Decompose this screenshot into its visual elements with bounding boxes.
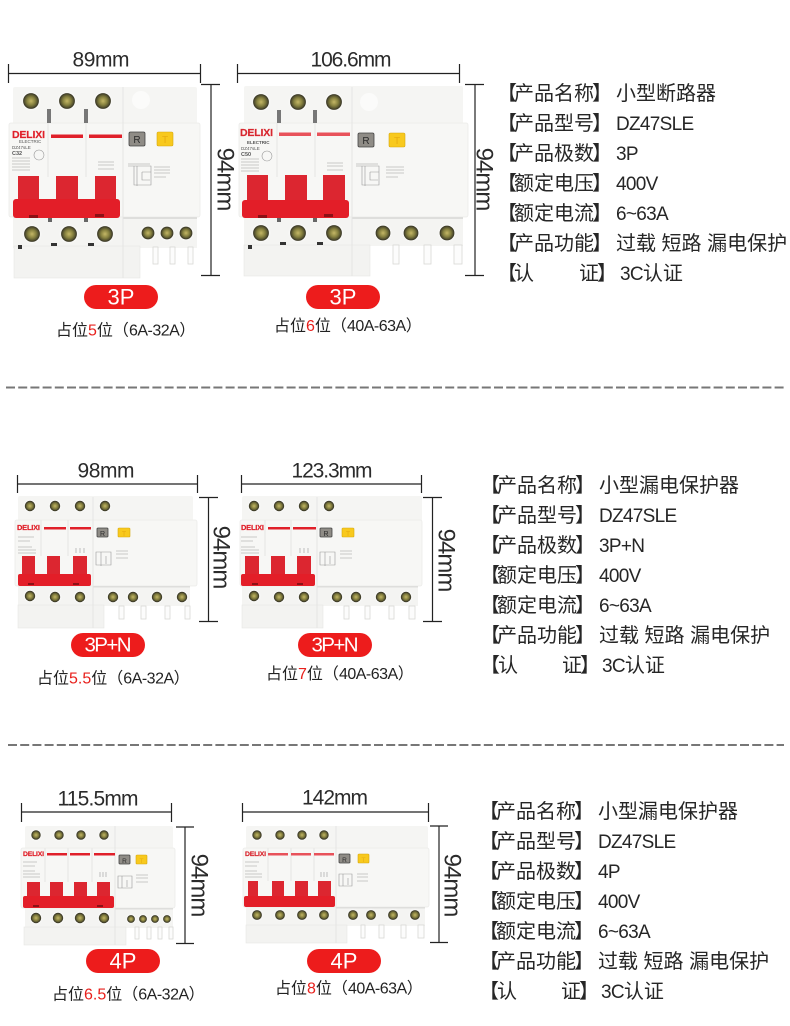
specification list: miniature circuit breaker: 小型断路器 — [616, 82, 716, 105]
specification list: miniature circuit breaker: 产品型号 — [514, 112, 594, 135]
specification list: 4P residual current protector: DZ47SLE — [598, 832, 676, 853]
pole badge: 3P+N: 3P+N — [84, 634, 132, 656]
specification list: 4P residual current protector: 【 — [479, 921, 499, 943]
dimension: height 94mm: 94mm — [208, 526, 234, 588]
breaker unit: 3P 106.6mm — [238, 48, 498, 335]
product photo: 3P breaker: T — [162, 135, 168, 146]
product photo: 3P breaker: C32 — [12, 151, 22, 157]
specification list: miniature circuit breaker: 400V — [616, 174, 659, 195]
specification list: 3P+N residual current protector: 【 — [480, 535, 500, 557]
product photo: 3P+N breaker — [15, 496, 197, 628]
pole badge: 3P+N — [71, 633, 145, 657]
specification list: 4P residual current protector: 4P — [598, 862, 620, 883]
product photo: 3P breaker: DELIXI — [12, 129, 45, 141]
dimension: height 94mm: 94mm — [212, 148, 238, 210]
specification list: miniature circuit breaker: 证 — [579, 262, 599, 285]
specification list: 3P+N residual current protector: 】 — [580, 655, 600, 677]
dimension: height 94mm: 94mm — [432, 529, 460, 591]
specification list: 4P residual current protector: 证 — [561, 980, 581, 1003]
dimension: height 94mm — [199, 498, 234, 622]
caption: occupies 5.5 positions: 占位5.5位（6A-32A） — [37, 670, 190, 688]
specification list: miniature circuit breaker: 【 — [497, 113, 517, 135]
product photo: 3P+N breaker: T — [122, 531, 127, 538]
specification list: 3P+N residual current protector: 额定电压 — [497, 564, 577, 587]
specification list: miniature circuit breaker: 产品名称 — [514, 82, 594, 105]
specification list: miniature circuit breaker: 】 — [592, 83, 612, 105]
caption: occupies 5 positions: 占位5位（6A-32A） — [56, 322, 195, 340]
breaker unit: 3P 89mm — [8, 48, 238, 340]
specification list: 3P+N residual current protector: 【 — [480, 475, 500, 497]
product photo: 3P+N breaker: DELIXI — [241, 523, 264, 532]
specification list: 4P residual current protector: 产品功能 — [496, 950, 576, 973]
specification list: 3P+N residual current protector: 证 — [562, 654, 582, 677]
product photo: 3P breaker: R — [133, 135, 141, 146]
caption: occupies 7 positions: 占位7位（40A-63A） — [266, 665, 414, 683]
specification list: miniature circuit breaker: 【 — [497, 83, 517, 105]
specification list: 4P residual current protector: 【 — [479, 951, 499, 973]
product photo: 4P breaker: T — [362, 857, 366, 864]
specification list: 4P residual current protector: 】 — [579, 981, 599, 1003]
product photo: 3P+N breaker: R — [323, 531, 329, 538]
product photo: 3P breaker — [239, 86, 468, 276]
specification list: 3P+N residual current protector: 产品名称 — [497, 474, 577, 497]
specification list: 3P+N residual current protector: 产品极数 — [497, 534, 577, 557]
specification list: 3P+N residual current protector: 】 — [575, 565, 595, 587]
specification list: 4P residual current protector: 】 — [574, 921, 594, 943]
specification list: miniature circuit breaker: 】 — [592, 113, 612, 135]
specification list: miniature circuit breaker: 【 — [497, 263, 517, 285]
specification list: 4P residual current protector: 额定电流 — [496, 920, 576, 943]
specification list: 3P+N residual current protector: 】 — [575, 505, 595, 527]
specification list: miniature circuit breaker — [497, 82, 787, 285]
specification list: miniature circuit breaker: 【 — [497, 173, 517, 195]
specification list: 4P residual current protector: 6~63A — [598, 922, 651, 943]
specification list: 4P residual current protector: 产品型号 — [496, 830, 576, 853]
specification list: 4P residual current protector: 】 — [574, 801, 594, 823]
dimension: width 142mm: 142mm — [302, 786, 368, 810]
specification list: 3P+N residual current protector: 【 — [480, 505, 500, 527]
pole badge: 4P: 4P — [331, 948, 357, 974]
product photo: 3P breaker: ELECTRIC — [247, 140, 270, 145]
dimension: height 94mm — [465, 84, 498, 276]
specification list: 3P+N residual current protector: 小型漏电保护器 — [599, 474, 739, 497]
product photo: 4P breaker: R — [122, 858, 127, 865]
specification list: 4P residual current protector: 】 — [574, 861, 594, 883]
specification list: 3P+N residual current protector: 过载 短路 漏电保护 — [599, 624, 770, 647]
specification list: 4P residual current protector — [479, 800, 769, 1003]
specification list: 3P+N residual current protector: 产品功能 — [497, 624, 577, 647]
dimension: height 94mm: 94mm — [470, 148, 498, 210]
specification list: 3P+N residual current protector: 6~63A — [599, 596, 652, 617]
specification list: miniature circuit breaker: 】 — [592, 173, 612, 195]
product photo: 3P+N breaker — [240, 496, 422, 628]
dimension: height 94mm — [423, 498, 460, 622]
specification list: 4P residual current protector: 【 — [479, 981, 499, 1003]
dimension: width 123.3mm — [242, 460, 422, 493]
pole badge: 4P — [86, 948, 160, 974]
dimension: width 89mm — [8, 48, 200, 83]
specification list: miniature circuit breaker: 产品极数 — [514, 142, 594, 165]
product photo: 3P breaker: R — [362, 136, 370, 147]
dimension: width 123.3mm: 123.3mm — [292, 460, 372, 482]
specification list: 3P+N residual current protector: 【 — [480, 625, 500, 647]
specification list: 3P+N residual current protector: 产品型号 — [497, 504, 577, 527]
dimension: width 98mm — [18, 460, 198, 493]
specification list: miniature circuit breaker: DZ47SLE — [616, 114, 694, 135]
specification list: 3P+N residual current protector: 认 — [498, 654, 518, 677]
specification list: 3P+N residual current protector: 】 — [575, 625, 595, 647]
specification list: 4P residual current protector: 额定电压 — [496, 890, 576, 913]
specification list: 3P+N residual current protector: 额定电流 — [497, 594, 577, 617]
specification list: 4P residual current protector: 】 — [574, 831, 594, 853]
dimension: width 98mm: 98mm — [78, 460, 134, 482]
specification list: 3P+N residual current protector: 】 — [575, 535, 595, 557]
specification list: 3P+N residual current protector: 【 — [480, 655, 500, 677]
specification list: miniature circuit breaker: 额定电流 — [514, 202, 594, 225]
product photo: 4P breaker: DELIXI — [245, 851, 266, 858]
specification list: miniature circuit breaker: 【 — [497, 233, 517, 255]
pole badge: 3P+N — [298, 633, 372, 657]
specification list: 3P+N residual current protector: 3C — [602, 656, 625, 677]
specification list: 4P residual current protector: 小型漏电保护器 — [598, 800, 738, 823]
specification list: 4P residual current protector: 认 — [497, 980, 517, 1003]
specification list: 4P residual current protector: 【 — [479, 861, 499, 883]
specification list: miniature circuit breaker: 【 — [497, 143, 517, 165]
specification list: miniature circuit breaker: 额定电压 — [514, 172, 594, 195]
specification list: miniature circuit breaker: 6~63A — [616, 204, 669, 225]
pole badge: 4P: 4P — [110, 948, 136, 974]
product photo: 4P breaker: R — [342, 857, 347, 864]
dimension: width 115.5mm: 115.5mm — [58, 788, 138, 810]
specification list: miniature circuit breaker: 过载 短路 漏电保护 — [616, 232, 787, 255]
pole badge: 3P — [84, 284, 158, 310]
pole badge: 3P — [306, 284, 380, 310]
product photo: 3P breaker: DZ47sLE — [12, 145, 31, 150]
specification list: 3P+N residual current protector: 3P+N — [599, 536, 644, 557]
specification list: miniature circuit breaker: 3C — [620, 264, 643, 285]
specification list: 3P+N residual current protector: 认证 — [625, 654, 665, 677]
specification list: 4P residual current protector: 】 — [574, 951, 594, 973]
specification list: 4P residual current protector: 【 — [479, 891, 499, 913]
dimension: width 106.6mm: 106.6mm — [310, 48, 392, 72]
specification list: miniature circuit breaker: 认证 — [643, 262, 683, 285]
specification list: miniature circuit breaker: 产品功能 — [514, 232, 594, 255]
dimension: width 106.6mm — [238, 48, 460, 83]
product photo: 3P breaker: ELECTRIC — [19, 139, 42, 144]
specification list: 4P residual current protector: 400V — [598, 892, 641, 913]
specification list: 4P residual current protector: 】 — [574, 891, 594, 913]
specification list: miniature circuit breaker: 】 — [597, 263, 617, 285]
product photo: 4P breaker — [243, 826, 429, 943]
specification list: 3P+N residual current protector: DZ47SLE — [599, 506, 677, 527]
specification list: 4P residual current protector: 产品名称 — [496, 800, 576, 823]
product photo: 3P breaker: T — [394, 136, 400, 147]
specification list: miniature circuit breaker: 认 — [514, 262, 534, 285]
specification list: 4P residual current protector: 过载 短路 漏电保护 — [598, 950, 769, 973]
specification list: 4P residual current protector: 产品极数 — [496, 860, 576, 883]
caption: occupies 6 positions: 占位6位（40A-63A） — [274, 317, 422, 335]
specification list: miniature circuit breaker: 【 — [497, 203, 517, 225]
product photo: 3P+N breaker: T — [346, 531, 351, 538]
product photo: 3P+N breaker: R — [100, 531, 105, 538]
dimension: width 89mm: 89mm — [72, 48, 130, 72]
specification list: miniature circuit breaker: 3P — [616, 144, 638, 165]
specification list: 3P+N residual current protector: 400V — [599, 566, 642, 587]
specification list: 4P residual current protector: 认证 — [624, 980, 664, 1003]
dimension: width 115.5mm — [22, 788, 172, 822]
caption: occupies 6.5 positions: 占位6.5位（6A-32A） — [52, 986, 205, 1004]
dimension: height 94mm — [430, 826, 466, 942]
pole badge: 3P+N: 3P+N — [312, 634, 358, 656]
dimension: height 94mm — [201, 84, 238, 276]
specification list: 3P+N residual current protector: 【 — [480, 595, 500, 617]
dimension: height 94mm — [176, 827, 212, 944]
pole badge: 3P: 3P — [330, 284, 356, 310]
breaker unit: 3P+N 98mm — [15, 460, 234, 688]
product photo: 4P breaker — [21, 826, 175, 945]
specification list: 4P residual current protector: 【 — [479, 801, 499, 823]
breaker unit: 4P 142mm — [242, 786, 466, 998]
specification list: miniature circuit breaker: 】 — [592, 233, 612, 255]
specification list: miniature circuit breaker: 】 — [592, 143, 612, 165]
product photo: 3P breaker: DZ47sLE — [241, 146, 260, 151]
specification list: 3P+N residual current protector: 】 — [575, 595, 595, 617]
pole badge: 3P: 3P — [108, 284, 134, 310]
product photo: 3P breaker — [9, 87, 200, 278]
specification list: 4P residual current protector: 3C — [601, 982, 624, 1003]
product photo: 3P breaker: C50 — [241, 152, 251, 158]
breaker unit: 4P 115.5mm — [21, 788, 212, 1004]
specification list: 4P residual current protector: 【 — [479, 831, 499, 853]
pole badge: 4P — [307, 948, 381, 974]
specification list: 3P+N residual current protector: 【 — [480, 565, 500, 587]
product photo: 4P breaker: T — [140, 858, 144, 865]
dimension: height 94mm: 94mm — [438, 854, 466, 916]
product photo: 3P+N breaker: DELIXI — [17, 523, 40, 532]
product photo: 3P breaker: DELIXI — [240, 127, 273, 139]
specification list: 3P+N residual current protector — [480, 474, 770, 677]
specification list: 3P+N residual current protector: 】 — [575, 475, 595, 497]
product photo: 4P breaker: DELIXI — [23, 851, 44, 858]
dimension: width 142mm — [242, 786, 428, 822]
specification list: miniature circuit breaker: 】 — [592, 203, 612, 225]
dimension: height 94mm: 94mm — [186, 854, 212, 916]
caption: occupies 8 positions: 占位8位（40A-63A） — [275, 980, 423, 998]
breaker unit: 3P+N 123.3mm — [240, 460, 460, 683]
